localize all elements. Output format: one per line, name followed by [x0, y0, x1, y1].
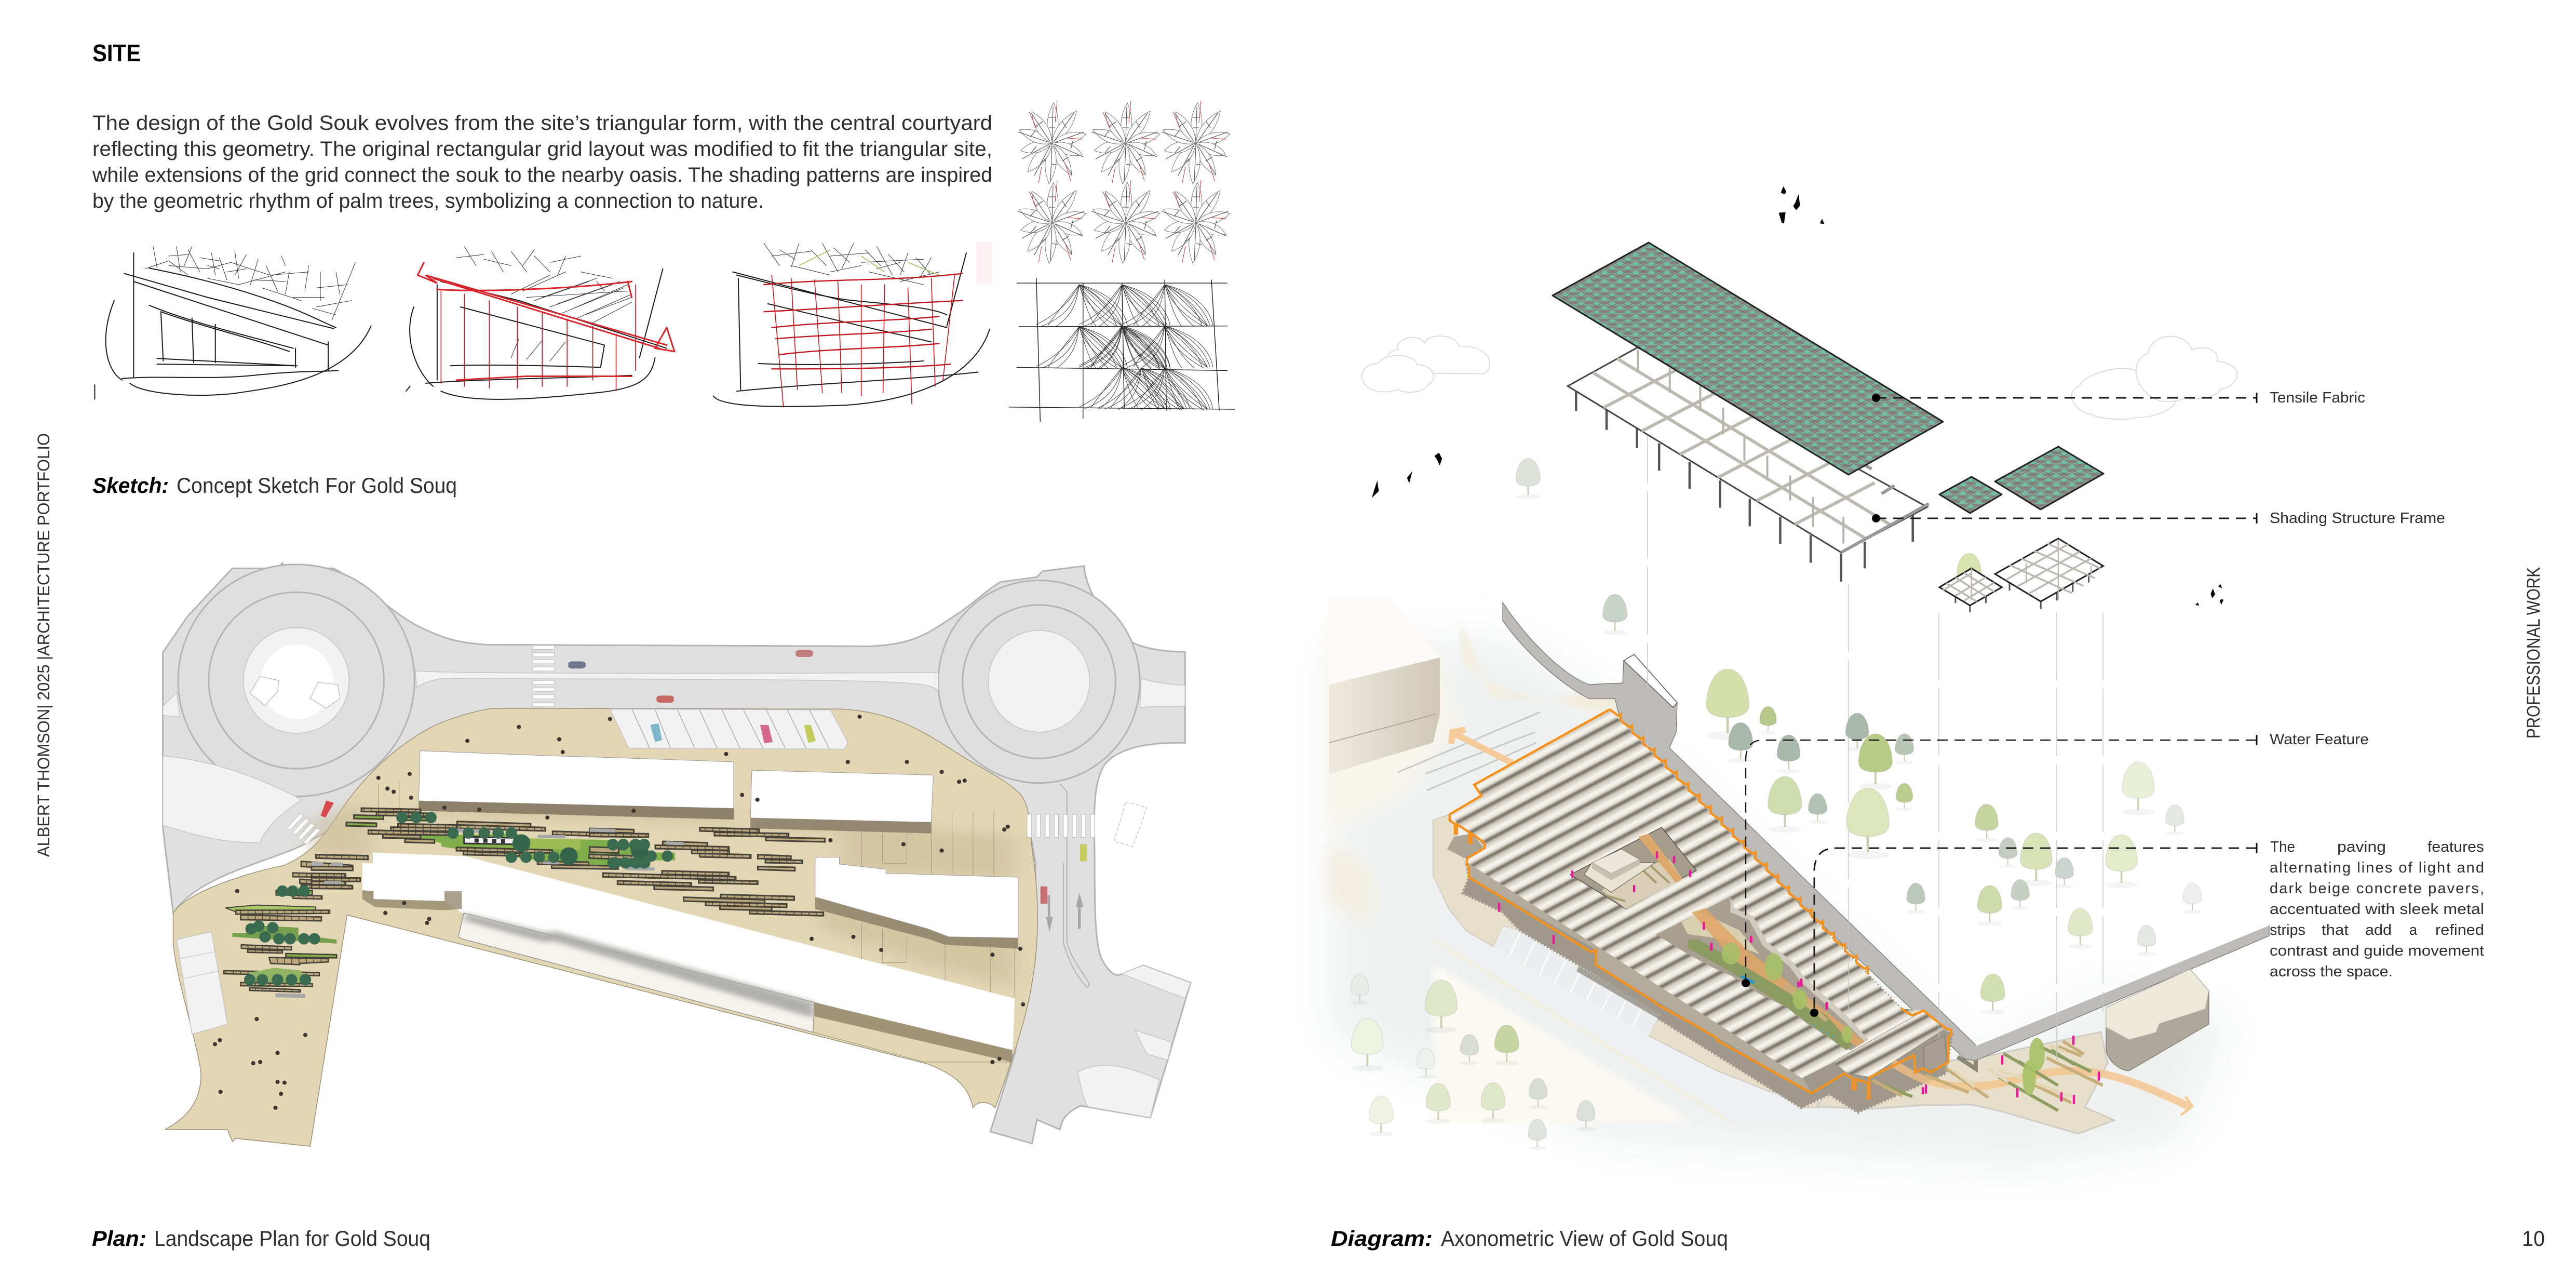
sketch 2: red overlay concept [406, 247, 675, 399]
callout: paving description: that [2322, 922, 2349, 938]
orange walkway [1692, 908, 1865, 1046]
left roundabout [178, 565, 414, 797]
ribbed roof [1450, 709, 1946, 1078]
birds [1372, 186, 2223, 606]
panel: landscape plan [163, 563, 1191, 1146]
sketch 1: first concept [95, 247, 371, 399]
caption: plan: Landscape Plan for Gold Souq [154, 1226, 430, 1251]
lower left trees [250, 891, 315, 980]
shading structure frame [1568, 347, 1929, 582]
lower left planters [224, 854, 368, 998]
page number: 10 [2522, 1226, 2545, 1251]
callout: paving description: contrast and guide movement [2270, 943, 2484, 959]
frame deck [1568, 347, 1927, 553]
callout: paving description: alternating lines of light and [2270, 860, 2484, 876]
frame columns [1576, 391, 1913, 582]
callout: paving description: strips [2270, 922, 2305, 938]
callout: paving description: paving [2337, 839, 2386, 855]
callout: paving description: dark beige concrete pavers, [2270, 880, 2484, 897]
crosswalks [287, 646, 1095, 844]
landscape strips [1872, 1041, 2103, 1110]
colonnade strip [458, 913, 814, 1032]
title: SITE [92, 39, 141, 66]
planter bars [312, 808, 649, 889]
long perimeter wall [1503, 602, 2269, 1069]
callout: paving description: The [2270, 839, 2295, 855]
callout: paving description: features [2427, 839, 2484, 855]
callout: paving description: accentuated with sleek metal [2270, 901, 2484, 918]
ground fade [1329, 618, 2233, 1169]
caption: sketch: Sketch: [92, 473, 169, 498]
caption: sketch: Concept Sketch For Gold Souq [177, 473, 457, 498]
paved plaza [165, 708, 1037, 1146]
courtyard floor [1656, 897, 1868, 1050]
paragraph: site design text [92, 112, 992, 212]
panel: concept sketches [95, 242, 1235, 421]
arrow: ground path [1893, 1063, 2192, 1115]
label: tensile fabric: Tensile Fabric [2270, 390, 2365, 406]
large trees in the bed [521, 843, 640, 856]
upper left building [1329, 597, 1540, 790]
callout: paving description: refined [2435, 922, 2484, 938]
road arrows [1046, 893, 1084, 932]
paragraph: site design text: while extensions of the grid connect the souk to the nearby oasis. The shading patterns are inspired [92, 164, 992, 186]
paving outlines [379, 782, 1015, 997]
side label: section: PROFESSIONAL WORK [2524, 567, 2544, 739]
medians and hatched islands [163, 670, 1191, 1118]
grey seating [312, 828, 655, 884]
palm pattern motifs [1017, 101, 1231, 263]
pavilion in lawn [464, 837, 516, 844]
callout leader lines [1746, 393, 2257, 1013]
inner stepped wall [1730, 897, 1868, 1041]
people [1704, 923, 1827, 1009]
left cloud [1386, 336, 1490, 374]
frame beams [1593, 358, 1891, 539]
panel: axonometric diagram [1329, 186, 2269, 1169]
wall shadow at west corner [1447, 834, 1485, 858]
service core [1924, 1036, 1947, 1071]
people on upper court and edge [1499, 852, 1690, 943]
upper wall band with columns [1467, 862, 1812, 1093]
side label: author: ALBERT THOMSON| 2025 |ARCHITECTURE PORTFOLIO [34, 433, 53, 857]
water jets [1815, 1026, 1833, 1037]
lawn [421, 834, 648, 867]
cap roof over end of court [1833, 1011, 1946, 1077]
car parking [610, 709, 848, 749]
label: water feature: Water Feature [2270, 731, 2369, 748]
caption: diagram: Diagram: [1331, 1226, 1433, 1251]
building walls below the roof [1463, 712, 1952, 1112]
caption: plan: Plan: [92, 1226, 146, 1251]
lattice sketch of fronds [1009, 278, 1235, 421]
building footprints [362, 751, 1018, 1054]
light projection lines [1648, 415, 2103, 1065]
orange edge line [1450, 709, 1951, 1098]
curved corner building [2106, 969, 2209, 1071]
right roundabout [938, 580, 1140, 783]
beige ground at the south end [1817, 1032, 2114, 1134]
label: shading frame: Shading Structure Frame [2270, 510, 2445, 527]
beige court paving [1682, 912, 1759, 954]
small plaza trees [215, 717, 1023, 1108]
callout: paving description: a [2409, 922, 2418, 938]
road, parking and beige ground beside the building [1433, 814, 1838, 1122]
courtyard trees [1722, 943, 1853, 1043]
oasis trees [1351, 459, 2202, 1150]
soft paving shadows [305, 800, 1015, 986]
caption: diagram [1331, 1226, 1728, 1251]
green strip [1688, 939, 1853, 1050]
right cloud [2071, 368, 2176, 419]
arrow: upper left route [1451, 730, 1512, 763]
main courtyard [1656, 897, 1868, 1050]
small fabric panels [1939, 447, 2103, 513]
tensile fabric main [1553, 243, 1943, 475]
sketch 3: red grid concept [713, 242, 992, 407]
paragraph: site design text: reflecting this geometry. The original rectangular grid layout was modified to fit the triangular site, [92, 138, 992, 160]
upper courtyard [1570, 827, 1696, 909]
water feature strip [1740, 975, 1755, 984]
central planting bed [312, 808, 675, 889]
paragraph: site design text: The design of the Gold Souk evolves from the site’s triangular form, with the central courtyard [92, 112, 992, 135]
building drop shadows [362, 801, 1018, 1063]
callout: paving description: across the space. [2270, 963, 2393, 980]
trees in the bed [402, 817, 667, 863]
callout: paving description: add [2365, 922, 2392, 938]
east planters [603, 827, 825, 916]
paragraph: site design text: by the geometric rhythm of palm trees, symbolizing a connection to nature. [92, 190, 764, 212]
small shading frames [1939, 539, 2103, 612]
caption: diagram: Axonometric View of Gold Souq [1441, 1226, 1728, 1251]
parking strip bottom left [177, 932, 227, 1034]
road network [163, 563, 1191, 1144]
plaza trees and people [1923, 1037, 2099, 1103]
clouds [1362, 336, 2237, 419]
callout: paving description [2270, 839, 2484, 980]
cars [321, 650, 1087, 904]
